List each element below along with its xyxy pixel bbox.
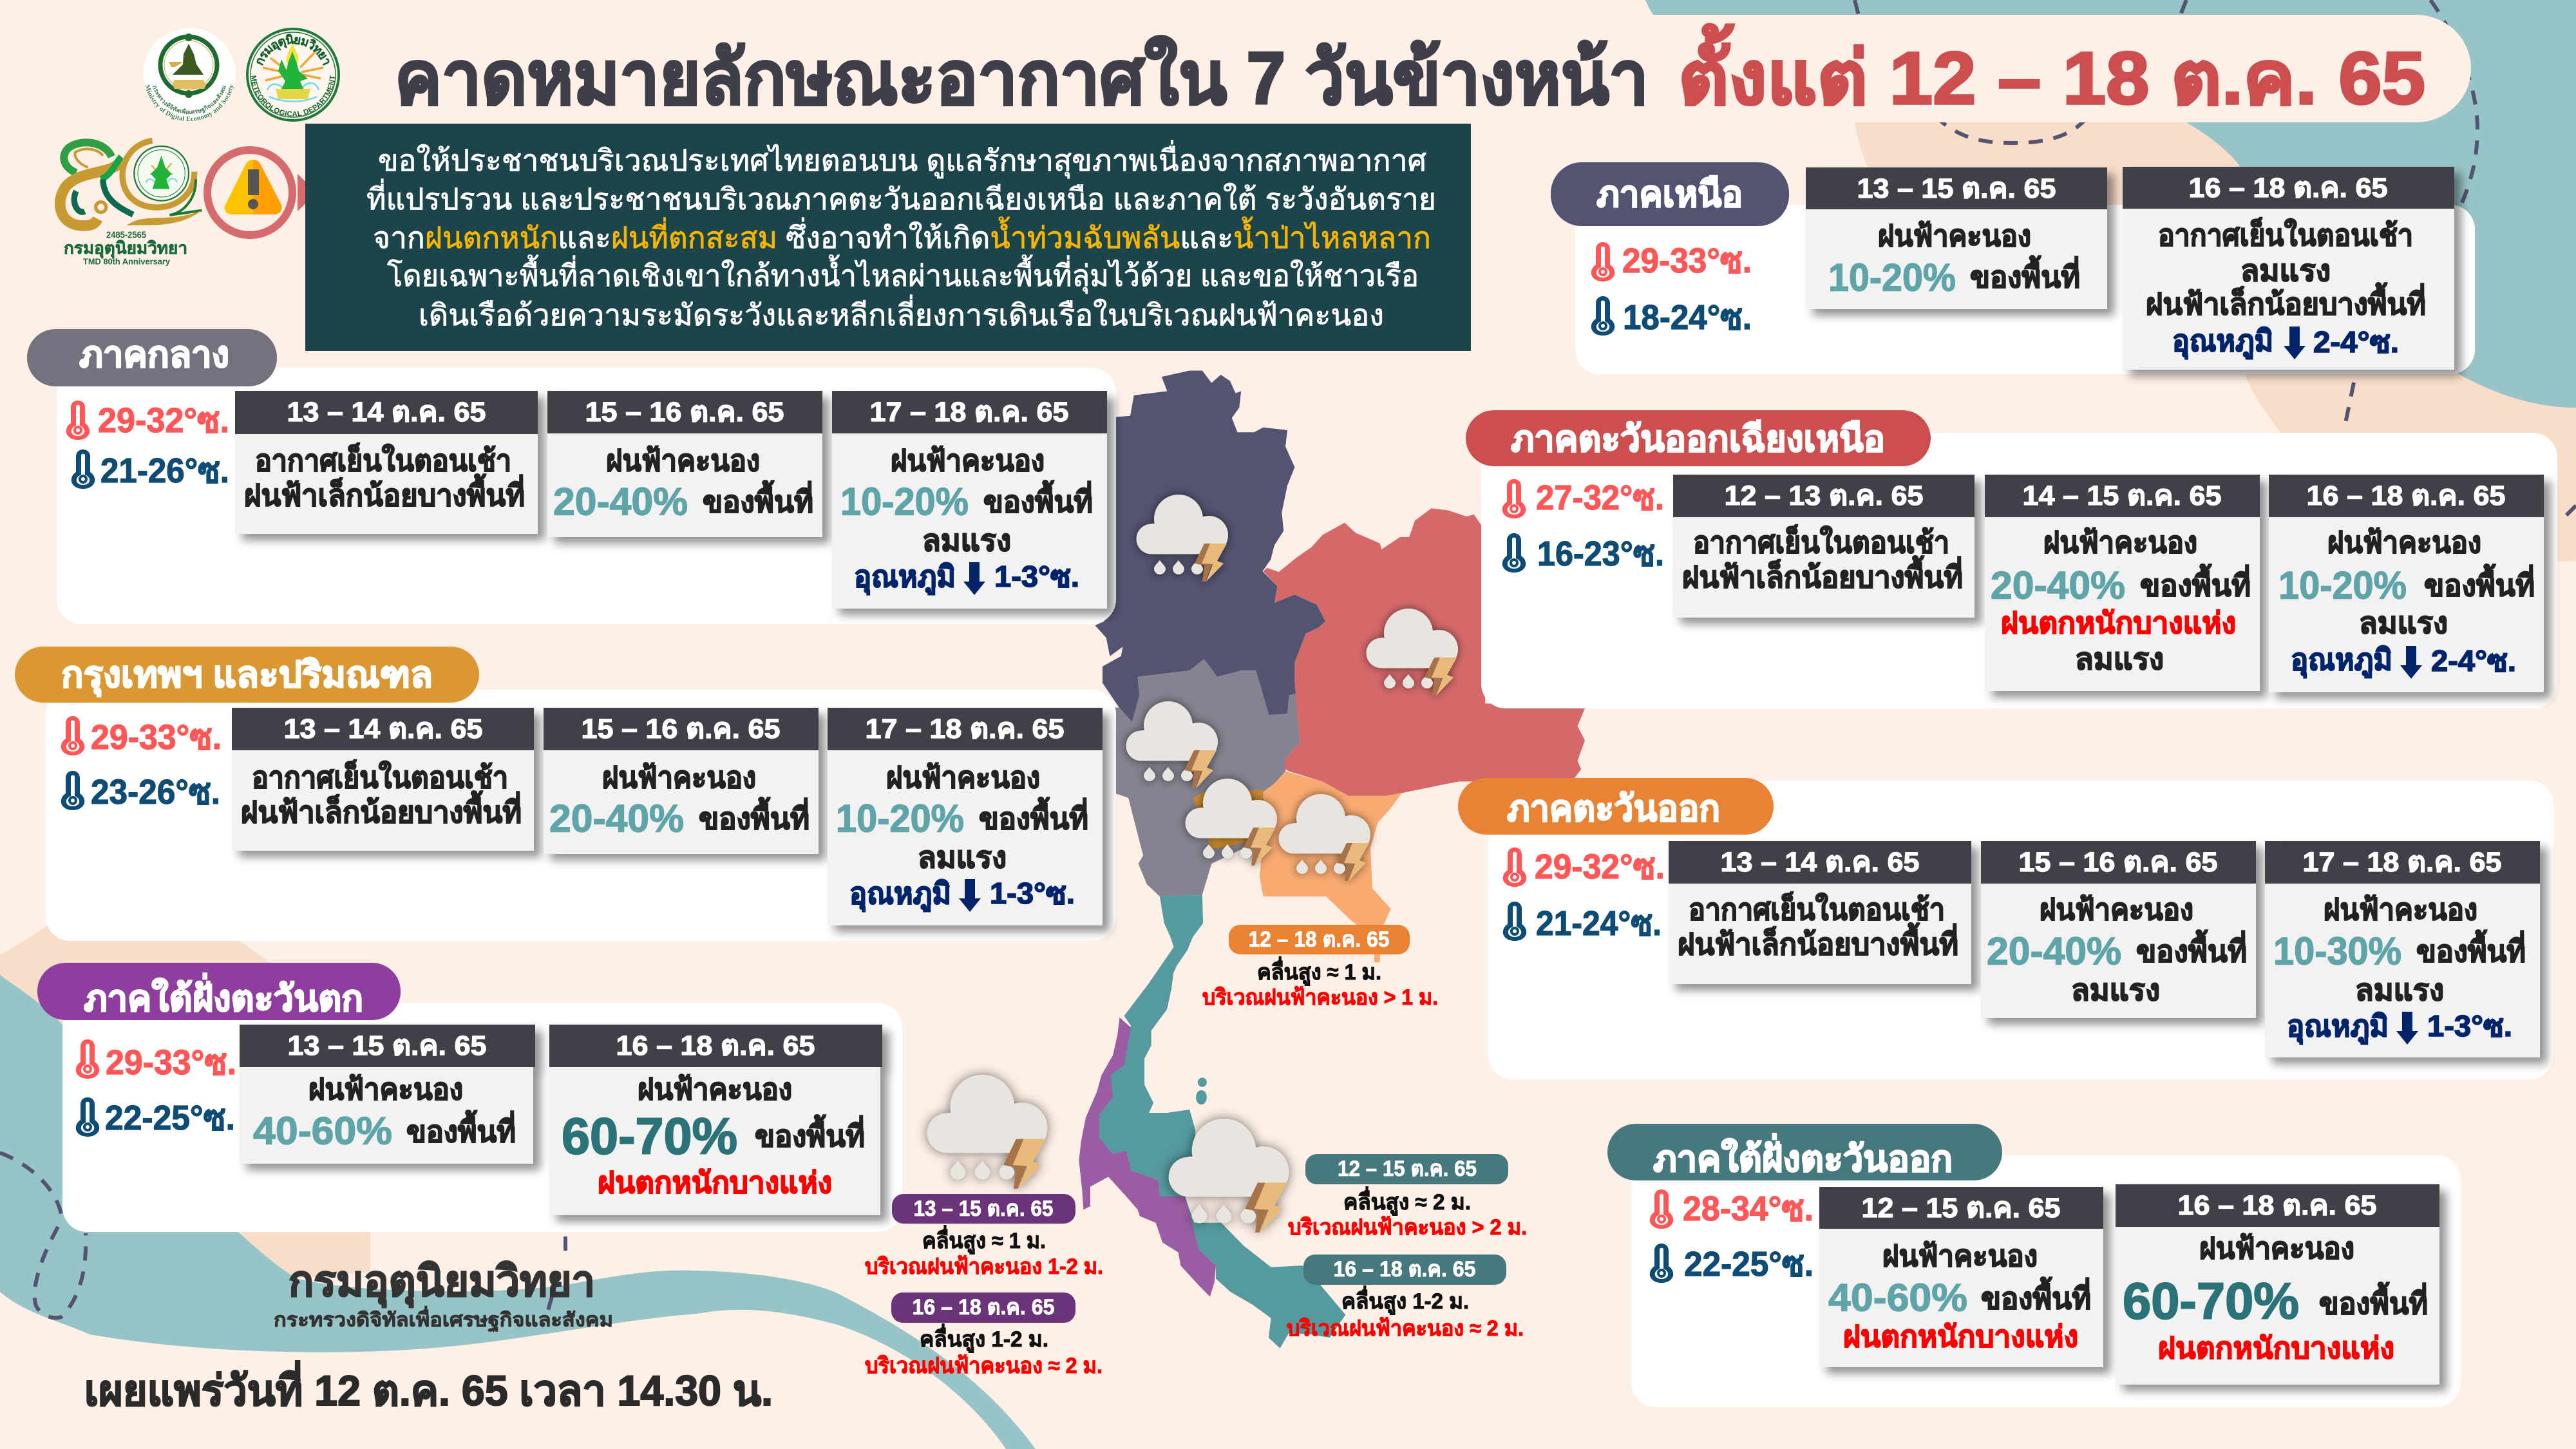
map region: Bangkok (1193, 790, 1264, 849)
heading: northeast (1466, 410, 1931, 466)
forecast 16-18: อุณหภูมิ (2291, 643, 2392, 678)
forecast 14-15: 20-40% (1991, 564, 2125, 607)
forecast 17-18 (2265, 841, 2540, 1057)
icon: warning badge (207, 150, 317, 235)
forecast 16-18: 10-20% (2278, 564, 2407, 607)
forecast 16-18 (2123, 167, 2454, 370)
forecast 17-18: อุณหภูมิ (854, 560, 956, 595)
forecast 15-16 (547, 391, 822, 537)
forecast 15-16 (544, 708, 819, 854)
logo: meteorological department seal: กรมอุตุนิยมวิทยา (256, 33, 330, 66)
map region: central (1104, 659, 1300, 896)
forecast 13-15: 13 – 15 ต.ค. 65 (287, 1030, 487, 1061)
wave label: east (1202, 925, 1438, 1010)
forecast 13-14: ฝนฟ้าเล็กน้อยบางพื้นที่ (244, 473, 525, 512)
islands (1196, 1077, 1207, 1104)
min temperature: 21-24°ซ. (1536, 904, 1662, 943)
forecast 16-18: 16 – 18 ต.ค. 65 (2307, 480, 2505, 511)
wave label: west 13-15: คลื่นสูง ≈ 1 ม. (922, 1225, 1046, 1255)
icons: storm clouds (927, 495, 1458, 1233)
panel: Bangkok and vicinity (15, 647, 1116, 941)
heading: northeast: ภาคตะวันออกเฉียงเหนือ (1511, 419, 1885, 459)
forecast 13-15: 13 – 15 ต.ค. 65 (1857, 173, 2056, 204)
wave label: gulf 12-15: บริเวณฝนฟ้าคะนอง > 2 ม. (1288, 1215, 1527, 1240)
forecast 17-18: ลมแรง (2355, 973, 2444, 1007)
forecast 15-16 (1981, 841, 2256, 1018)
cloud: Bangkok (1185, 779, 1277, 866)
logo: meteorological department seal: METEOROLOGICAL DEPARTMENT (251, 75, 335, 117)
logo: 80th anniversary: กรมอุตุนิยมวิทยา (64, 238, 187, 259)
map region: northeast (1264, 508, 1585, 796)
map region: north (1095, 371, 1325, 722)
wave label: west 16-18: 16 – 18 ต.ค. 65 (912, 1295, 1055, 1320)
decorative blob: top right teal (1645, 0, 2576, 408)
map region: east (1260, 772, 1402, 962)
forecast 16-18 (549, 1025, 882, 1215)
forecast 13-14: อากาศเย็นในตอนเช้า (255, 442, 511, 477)
map region: south west coast (1079, 1018, 1216, 1297)
forecast 16-18: ลมแรง (2359, 606, 2448, 639)
forecast 16-18: 2-4°ซ. (2313, 325, 2399, 359)
max temperature: 29-33°ซ. (91, 718, 222, 757)
title: คาดหมายลักษณะอากาศใน 7 วันข้างหน้า (395, 36, 1649, 120)
panel: south east coast (1607, 1124, 2461, 1407)
forecast 16-18: 16 – 18 ต.ค. 65 (2178, 1190, 2376, 1221)
cloud: east (1279, 794, 1370, 881)
forecast 12-13: ฝนฟ้าเล็กน้อยบางพื้นที่ (1682, 555, 1963, 594)
cloud: south east (1169, 1119, 1289, 1233)
wave label: gulf 16-18: คลื่นสูง 1-2 ม. (1341, 1285, 1469, 1315)
forecast 13-14: 13 – 14 ต.ค. 65 (1721, 847, 1919, 878)
min temperature (1503, 902, 1662, 943)
forecast 16-18: 60-70% (562, 1108, 737, 1164)
wave label: west 13-15: บริเวณฝนฟ้าคะนอง 1-2 ม. (865, 1255, 1103, 1279)
decorative blob: top right peach (1852, 97, 2576, 562)
forecast 17-18: 17 – 18 ต.ค. 65 (866, 714, 1064, 744)
forecast 12-13: 12 – 13 ต.ค. 65 (1725, 480, 1923, 511)
forecast 16-18: ลมแรง (2240, 254, 2331, 287)
alert box: เดินเรือด้วยความระมัดระวังและหลีกเลี่ยงการเดินเรือในบริเวณฝนฟ้าคะนอง (419, 294, 1384, 332)
alert box: ขอให้ประชาชนบริเวณประเทศไทยตอนบน ดูแลรักษาสุขภาพเนื่องจากสภาพอากาศ (378, 140, 1426, 179)
forecast 17-18 (832, 391, 1107, 609)
forecast 15-16: ฝนฟ้าคะนอง (2040, 893, 2193, 926)
heading: south east coast (1607, 1124, 2002, 1180)
forecast 12-15: ฝนฟ้าคะนอง (1882, 1239, 2038, 1273)
panel: east (1458, 778, 2553, 1079)
forecast 15-16: 20-40% (553, 480, 688, 523)
logo: 80th anniversary: 2485-2565 (106, 229, 146, 241)
title: ตั้งแต่ 12 – 18 ต.ค. 65 (1678, 24, 2425, 120)
forecast 15-16: ของพื้นที่ (2136, 929, 2247, 968)
cloud: north (1136, 495, 1228, 582)
forecast 13-15: ฝนฟ้าคะนอง (308, 1072, 463, 1106)
forecast 13-14: ฝนฟ้าเล็กน้อยบางพื้นที่ (1678, 922, 1958, 961)
forecast 16-18 (2116, 1184, 2439, 1385)
forecast 12-15: ฝนตกหนักบางแห่ง (1843, 1320, 2078, 1353)
max temperature: 29-32°ซ. (1535, 848, 1665, 886)
forecast 12-15: 12 – 15 ต.ค. 65 (1861, 1193, 2061, 1224)
forecast 12-15 (1819, 1187, 2103, 1367)
min temperature: 22-25°ซ. (105, 1099, 235, 1137)
forecast 14-15: ฝนฟ้าคะนอง (2043, 526, 2197, 559)
wave label: gulf 12-15: 12 – 15 ต.ค. 65 (1338, 1157, 1477, 1181)
forecast 14-15: 14 – 15 ต.ค. 65 (2022, 480, 2222, 511)
forecast 16-18: ฝนฟ้าเล็กน้อยบางพื้นที่ (2146, 282, 2426, 321)
wave label: gulf 16-18: 16 – 18 ต.ค. 65 (1333, 1257, 1476, 1282)
forecast 13-14: 13 – 14 ต.ค. 65 (287, 397, 486, 428)
forecast 17-18: ฝนฟ้าคะนอง (2324, 893, 2477, 926)
forecast 16-18: 16 – 18 ต.ค. 65 (2188, 173, 2388, 204)
max temperature: 29-32°ซ. (98, 401, 229, 440)
alert box (305, 124, 1471, 351)
forecast 13-15: 10-20% (1828, 256, 1956, 299)
wave label: gulf 12-15: คลื่นสูง ≈ 2 ม. (1343, 1186, 1471, 1216)
wave label: west 13-15: 13 – 15 ต.ค. 65 (913, 1197, 1054, 1221)
forecast 14-15: ของพื้นที่ (2140, 564, 2251, 602)
forecast 16-18: ฝนตกหนักบางแห่ง (2158, 1331, 2394, 1365)
forecast 17-18: 10-20% (836, 797, 964, 840)
alert box: จากฝนตกหนักและฝนที่ตกสะสม ซึ่งอาจทำให้เกิดน้ำท่วมฉับพลันและน้ำป่าไหลหลาก (373, 216, 1431, 254)
forecast 15-16: ของพื้นที่ (699, 797, 810, 835)
forecast 15-16: 20-40% (1987, 930, 2121, 972)
forecast 17-18: 10-20% (840, 480, 969, 523)
logo: ministry seal: กระทรวงดิจิทัลเพื่อเศรษฐกิจและสังคม (153, 85, 226, 115)
min temperature: 16-23°ซ. (1537, 535, 1664, 573)
forecast 16-18: ของพื้นที่ (2424, 564, 2535, 602)
forecast 12-15: ของพื้นที่ (1981, 1276, 2091, 1315)
forecast 15-16: 20-40% (549, 797, 684, 840)
map of Thailand (1079, 371, 1585, 1349)
alert box: ที่แปรปรวน และประชาชนบริเวณภาคตะวันออกเฉียงเหนือ และภาคใต้ ระวังอันตราย (366, 178, 1436, 216)
forecast 13-15 (1806, 167, 2107, 309)
forecast 16-18: 60-70% (2123, 1273, 2299, 1329)
forecast 17-18: 17 – 18 ต.ค. 65 (2303, 847, 2501, 878)
forecast 17-18 (828, 708, 1103, 925)
wave label: east: 12 – 18 ต.ค. 65 (1248, 927, 1390, 952)
forecast 16-18: 16 – 18 ต.ค. 65 (616, 1030, 815, 1061)
heading: Bangkok (15, 647, 479, 703)
cloud: northeast (1367, 609, 1458, 696)
forecast 17-18: 1-3°ซ. (994, 560, 1079, 593)
forecast 17-18: ลมแรง (922, 524, 1011, 557)
wave label: east: บริเวณฝนฟ้าคะนอง > 1 ม. (1202, 985, 1438, 1010)
forecast 13-14 (232, 708, 534, 851)
forecast 17-18: 17 – 18 ต.ค. 65 (869, 397, 1069, 428)
title (395, 24, 2425, 120)
forecast 17-18: ฝนฟ้าคะนอง (891, 444, 1045, 477)
forecast 16-18: ฝนฟ้าคะนอง (2327, 526, 2481, 559)
heading: south west coast: ภาคใต้ฝั่งตะวันตก (84, 972, 363, 1019)
forecast 16-18: ฝนฟ้าคะนอง (2199, 1231, 2354, 1265)
heading: Bangkok: กรุงเทพฯ และปริมณฑล (61, 654, 433, 697)
logo: 80th anniversary: TMD 80th Anniversary (83, 256, 171, 267)
forecast 12-13: อากาศเย็นในตอนเช้า (1693, 524, 1949, 559)
forecast 17-18: 10-30% (2273, 930, 2401, 972)
map region: upper south teal (1141, 895, 1203, 998)
heading: east: ภาคตะวันออก (1507, 788, 1720, 828)
heading: north (1551, 162, 1789, 226)
forecast 14-15: ลมแรง (2075, 642, 2164, 676)
heading: south east coast: ภาคใต้ฝั่งตะวันออก (1653, 1133, 1953, 1179)
max temperature: 28-34°ซ. (1683, 1189, 1814, 1228)
forecast 17-18: ของพื้นที่ (983, 480, 1093, 518)
heading: east (1458, 778, 1774, 835)
forecast 13-15: ของพื้นที่ (406, 1110, 516, 1148)
forecast 13-14: ฝนฟ้าเล็กน้อยบางพื้นที่ (241, 790, 522, 829)
logo: 80th anniversary (60, 140, 202, 267)
forecast 12-15: 40-60% (1828, 1276, 1967, 1319)
forecast 13-14: อากาศเย็นในตอนเช้า (252, 759, 508, 794)
forecast 13-14 (235, 391, 538, 534)
forecast 16-18: อากาศเย็นในตอนเช้า (2158, 217, 2413, 252)
max temperature: 29-33°ซ. (1622, 242, 1752, 280)
forecast 14-15: ฝนตกหนักบางแห่ง (2001, 606, 2236, 639)
forecast 14-15 (1985, 475, 2260, 691)
alert box: โดยเฉพาะพื้นที่ลาดเชิงเขาใกล้ทางน้ำไหลผ่านและพื้นที่ลุ่มไว้ด้วย และขอให้ชาวเรือ (387, 254, 1419, 294)
forecast 17-18: ลมแรง (918, 840, 1007, 874)
forecast 13-15: 40-60% (253, 1109, 392, 1153)
forecast 13-14: 13 – 14 ต.ค. 65 (283, 714, 483, 744)
footer: publish date: เผยแพร่วันที่ 12 ต.ค. 65 เวลา 14.30 น. (84, 1360, 773, 1414)
panel: south west coast (37, 963, 902, 1232)
forecast 16-18: ของพื้นที่ (2319, 1282, 2428, 1320)
wave label: west 16-18: คลื่นสูง 1-2 ม. (920, 1323, 1048, 1353)
panel: northeast (1466, 410, 2557, 708)
footer: department name: กระทรวงดิจิทัลเพื่อเศรษฐกิจและสังคม (274, 1306, 613, 1333)
forecast 17-18: ของพื้นที่ (2416, 929, 2526, 968)
wave label: west 16-18: บริเวณฝนฟ้าคะนอง ≈ 2 ม. (865, 1354, 1103, 1378)
wave label: east: คลื่นสูง ≈ 1 ม. (1257, 956, 1381, 986)
forecast 17-18: ฝนฟ้าคะนอง (886, 761, 1040, 794)
wave label: gulf 12-15 (1288, 1154, 1527, 1240)
panel: central (27, 329, 1116, 624)
forecast 13-15: ฝนฟ้าคะนอง (1878, 219, 2031, 252)
forecast 13-15: ของพื้นที่ (1970, 255, 2080, 294)
forecast 17-18: อุณหภูมิ (2287, 1009, 2389, 1045)
max temperature: 29-33°ซ. (106, 1043, 236, 1082)
forecast 15-16: ลมแรง (2071, 973, 2160, 1007)
logo: ministry seal (143, 28, 236, 121)
map region: south east coast (1099, 934, 1345, 1349)
forecast 15-16: 15 – 16 ต.ค. 65 (2018, 847, 2218, 878)
logo: ministry seal: Ministry of Digital Economy and Society (145, 84, 234, 121)
cloud: central (1126, 701, 1218, 788)
footer: department name: กรมอุตุนิยมวิทยา (289, 1257, 595, 1308)
heading: central (27, 329, 277, 386)
forecast 17-18: 1-3°ซ. (2427, 1009, 2512, 1043)
forecast 15-16: ของพื้นที่ (703, 480, 813, 518)
heading: north: ภาคเหนือ (1596, 174, 1743, 214)
wave label: west 13-15 (865, 1194, 1103, 1279)
forecast 17-18: ของพื้นที่ (979, 797, 1088, 835)
min temperature: 18-24°ซ. (1623, 298, 1752, 337)
footer: department name (274, 1257, 613, 1333)
decorative blob: bottom left teal wave (0, 975, 1036, 1449)
forecast 16-18: ฝนฟ้าคะนอง (638, 1072, 792, 1106)
decorative blob: bottom left peach (0, 914, 370, 1278)
min temperature: 23-26°ซ. (91, 773, 220, 811)
max temperature: 27-32°ซ. (1536, 478, 1664, 517)
min temperature: 22-25°ซ. (1684, 1245, 1814, 1283)
forecast 12-13 (1673, 475, 1975, 618)
forecast 16-18: อุณหภูมิ (2172, 324, 2273, 359)
forecast 16-18: ของพื้นที่ (755, 1114, 865, 1153)
forecast 16-18: ฝนตกหนักบางแห่ง (598, 1166, 832, 1199)
heading: central: ภาคกลาง (79, 334, 229, 375)
panel: north (1551, 162, 2475, 374)
title band (1224, 15, 2471, 122)
wave label: west 16-18 (865, 1293, 1103, 1378)
forecast 15-16: ฝนฟ้าคะนอง (606, 444, 760, 477)
forecast 15-16: 15 – 16 ต.ค. 65 (585, 397, 784, 428)
forecast 13-15 (240, 1025, 535, 1164)
heading: south west coast (37, 963, 401, 1020)
forecast 13-14 (1669, 841, 1971, 984)
cloud: south west (927, 1075, 1047, 1189)
min temperature: 21-26°ซ. (100, 451, 229, 490)
forecast 16-18 (2269, 475, 2544, 692)
forecast 17-18: 1-3°ซ. (990, 876, 1075, 910)
wave label: gulf 16-18 (1287, 1255, 1524, 1341)
forecast 15-16: ฝนฟ้าคะนอง (602, 761, 756, 794)
forecast 15-16: 15 – 16 ต.ค. 65 (581, 714, 781, 744)
forecast 13-14: อากาศเย็นในตอนเช้า (1689, 891, 1945, 926)
forecast 17-18: อุณหภูมิ (849, 876, 951, 912)
logo: meteorological department seal (246, 28, 340, 122)
forecast 16-18: 2-4°ซ. (2431, 644, 2516, 677)
wave label: gulf 16-18: บริเวณฝนฟ้าคะนอง ≈ 2 ม. (1287, 1316, 1524, 1341)
